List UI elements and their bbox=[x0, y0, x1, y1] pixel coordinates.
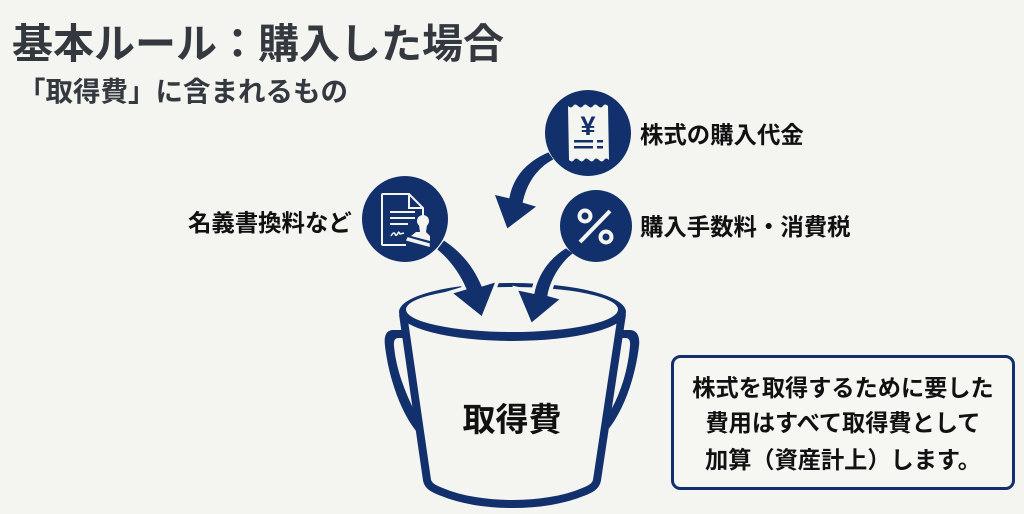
callout bbox=[672, 356, 1014, 488]
bucket bbox=[385, 283, 639, 504]
callout: 加算（資産計上）します。 bbox=[705, 447, 981, 473]
icon: document with stamp bbox=[362, 176, 448, 262]
bucket body bbox=[403, 314, 622, 504]
label: commission and tax: 購入手数料・消費税 bbox=[640, 214, 851, 240]
bucket left handle bbox=[385, 330, 416, 431]
title: 基本ルール：購入した場合 bbox=[12, 21, 504, 67]
bucket label: 取得費 bbox=[462, 401, 562, 438]
icon: receipt with yen bbox=[545, 90, 631, 176]
bucket right handle bbox=[607, 330, 639, 431]
arrow: purchase price to bucket bbox=[495, 152, 553, 228]
bucket rim bbox=[399, 283, 626, 341]
subtitle: 「取得費」に含まれるもの bbox=[18, 76, 348, 107]
label: transfer fee: 名義書換料など bbox=[188, 210, 352, 236]
icon: receipt with yen: ¥ bbox=[580, 111, 596, 141]
label: purchase price: 株式の購入代金 bbox=[640, 122, 804, 148]
arrow: transfer fee into bucket bbox=[437, 241, 495, 316]
icon: percent bbox=[560, 190, 632, 262]
callout: 株式を取得するために要した bbox=[692, 375, 994, 401]
callout: 費用はすべて取得費として bbox=[705, 410, 981, 436]
arrow: commission into bucket bbox=[518, 248, 573, 322]
